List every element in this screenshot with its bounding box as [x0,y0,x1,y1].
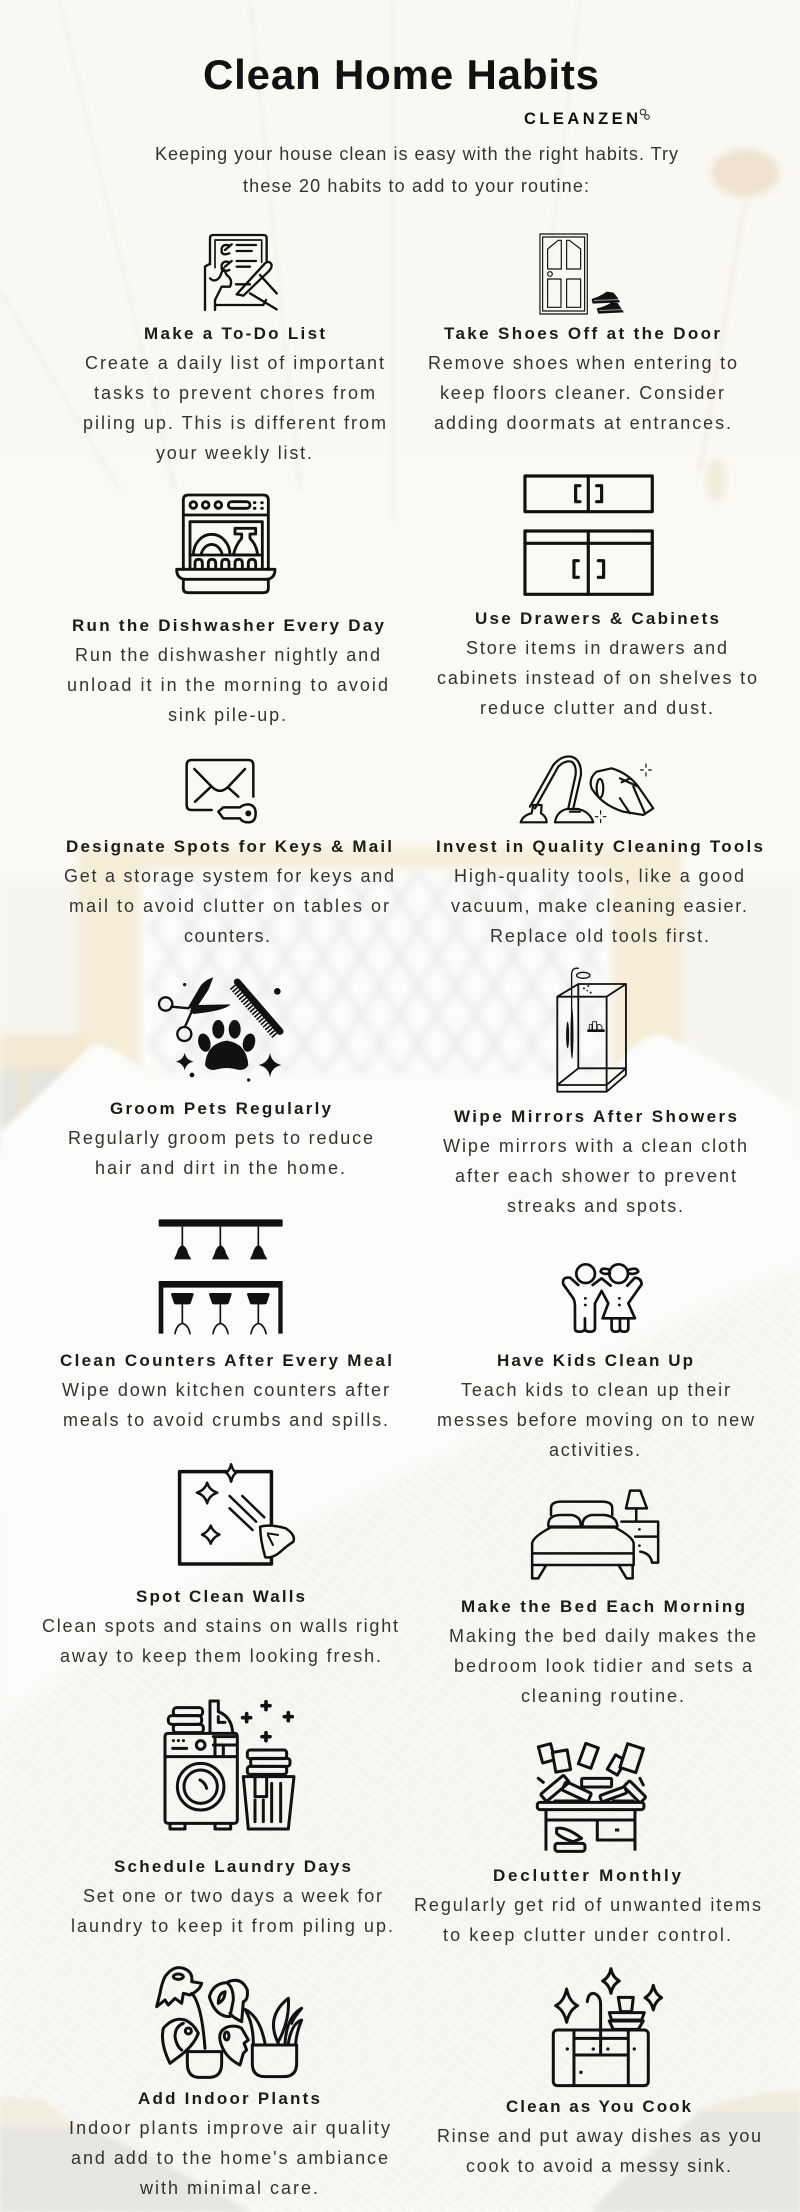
heading: Run the Dishwasher Every Day [72,616,385,635]
panel: Designate Spots for Keys & Mail [64,760,394,946]
heading: Wipe Mirrors After Showers [454,1107,737,1126]
panel: Make the Bed Each Morning [449,1491,756,1706]
heading: Use Drawers & Cabinets [475,609,719,628]
icon: sink cabinet with sparkles [553,1969,662,2086]
text block: Making the bed daily makes the [449,1626,756,1646]
text block: counters. [184,926,270,946]
text block [83,353,386,463]
text block: mail to avoid clutter on tables or [69,896,389,916]
text block: piling up. This is different from [83,413,386,433]
icon: potted plants [157,1968,302,2077]
text block: your weekly list. [156,443,312,463]
text block: Clean spots and stains on walls right [42,1616,398,1636]
icon: vacuum cleaners [521,756,653,823]
text block [414,1895,761,1945]
text block [71,1886,393,1936]
text block: High-quality tools, like a good [454,866,744,886]
heading: Clean Counters After Every Meal [60,1351,392,1370]
text block: laundry to keep it from piling up. [71,1916,393,1936]
panel: Invest in Quality Cleaning Tools [436,756,763,946]
text block: Run the dishwasher nightly and [75,645,380,665]
panel: Schedule Laundry Days [71,1701,393,1936]
text block: Replace old tools first. [490,926,709,946]
text block: bedroom look tidier and sets a [454,1656,753,1676]
heading: Designate Spots for Keys & Mail [66,837,392,856]
text block: and add to the home's ambiance [71,2148,388,2168]
text block [451,866,747,946]
text block [437,638,757,718]
icon: dishwasher [177,495,275,593]
text block: reduce clutter and dust. [480,698,713,718]
text block: Teach kids to clean up their [461,1380,730,1400]
heading: Invest in Quality Cleaning Tools [436,837,763,856]
icon: shower cabin [557,968,626,1092]
heading: Clean as You Cook [506,2097,692,2116]
text block [67,645,388,725]
text block: meals to avoid crumbs and spills. [63,1410,388,1430]
text block: with minimal care. [139,2178,318,2198]
text block: cook to avoid a messy sink. [466,2156,731,2176]
heading: Declutter Monthly [493,1866,682,1885]
text block [437,1380,755,1460]
panel: Declutter Monthly [414,1743,761,1945]
text block: streaks and spots. [507,1196,683,1216]
text block [449,1626,756,1706]
text block: Store items in drawers and [466,638,727,658]
text block: Rinse and put away dishes as you [437,2126,761,2146]
text block: Indoor plants improve air quality [69,2118,390,2138]
panel: Make a To-Do List [83,235,386,463]
icon: two kids [563,1264,642,1332]
text block: Wipe down kitchen counters after [62,1380,389,1400]
heading: Make a To-Do List [144,324,325,343]
heading: Take Shoes Off at the Door [444,324,720,343]
text block: unload it in the morning to avoid [67,675,388,695]
text block [428,353,737,433]
text block: keep floors cleaner. Consider [440,383,724,403]
text block: away to keep them looking fresh. [60,1646,381,1666]
text block: hair and dirt in the home. [95,1158,345,1178]
icon: checklist tablet and hand [205,235,277,310]
panel: Groom Pets Regularly [68,977,373,1178]
icon: scissors, comb and paw [159,977,281,1082]
text block [68,1128,373,1178]
intro text: these 20 habits to add to your routine: [243,176,589,196]
text block: Create a daily list of important [85,353,384,373]
panel: Run the Dishwasher Every Day [67,495,388,725]
text block: messes before moving on to new [437,1410,755,1430]
intro text [155,144,678,196]
text block [69,2118,390,2198]
panel: Add Indoor Plants [69,1968,390,2198]
text block: Set one or two days a week for [83,1886,382,1906]
icon: envelope and key [187,760,256,822]
panel: Spot Clean Walls [42,1464,398,1666]
intro text: Keeping your house clean is easy with the right habits. Try [155,144,678,164]
text block: Regularly get rid of unwanted items [414,1895,761,1915]
icon: cluttered desk [537,1743,646,1851]
panel: Clean Counters After Every Meal [60,1219,392,1430]
logo: CLEANZEN: CLEANZEN [524,110,638,128]
text block: to keep clutter under control. [443,1925,731,1945]
panel: Have Kids Clean Up [437,1264,755,1460]
text block: tasks to prevent chores from [94,383,375,403]
title: Clean Home Habits [203,51,599,98]
panel: Clean as You Cook [437,1969,761,2176]
icon: counter with pendant lights and stools [159,1219,283,1334]
icon: bed and nightstand [532,1491,658,1578]
icon: door and shoes [540,234,624,314]
text block: Regularly groom pets to reduce [68,1128,373,1148]
heading: Spot Clean Walls [136,1587,305,1606]
panel: Take Shoes Off at the Door [428,234,737,433]
panel: Wipe Mirrors After Showers [443,968,747,1216]
heading: Have Kids Clean Up [497,1351,693,1370]
text block: cleaning routine. [521,1686,684,1706]
text block [64,866,394,946]
text block [42,1616,398,1666]
heading: Schedule Laundry Days [114,1857,351,1876]
text block [437,2126,761,2176]
heading: Make the Bed Each Morning [461,1597,745,1616]
text block: cabinets instead of on shelves to [437,668,757,688]
text block: after each shower to prevent [455,1166,736,1186]
icon: cabinets [525,476,652,594]
text block: activities. [549,1440,640,1460]
text block: sink pile-up. [168,705,286,725]
icon: washing machine and basket [165,1701,294,1829]
text block [62,1380,389,1430]
text block: Wipe mirrors with a clean cloth [443,1136,747,1156]
text block [443,1136,747,1216]
text block: Get a storage system for keys and [64,866,394,886]
panel: Use Drawers & Cabinets [437,476,757,718]
icon: sparkling wall and cloth [180,1464,294,1564]
text block: vacuum, make cleaning easier. [451,896,747,916]
text block: Remove shoes when entering to [428,353,737,373]
text block: adding doormats at entrances. [434,413,731,433]
heading: Add Indoor Plants [138,2089,320,2108]
heading: Groom Pets Regularly [110,1099,332,1118]
